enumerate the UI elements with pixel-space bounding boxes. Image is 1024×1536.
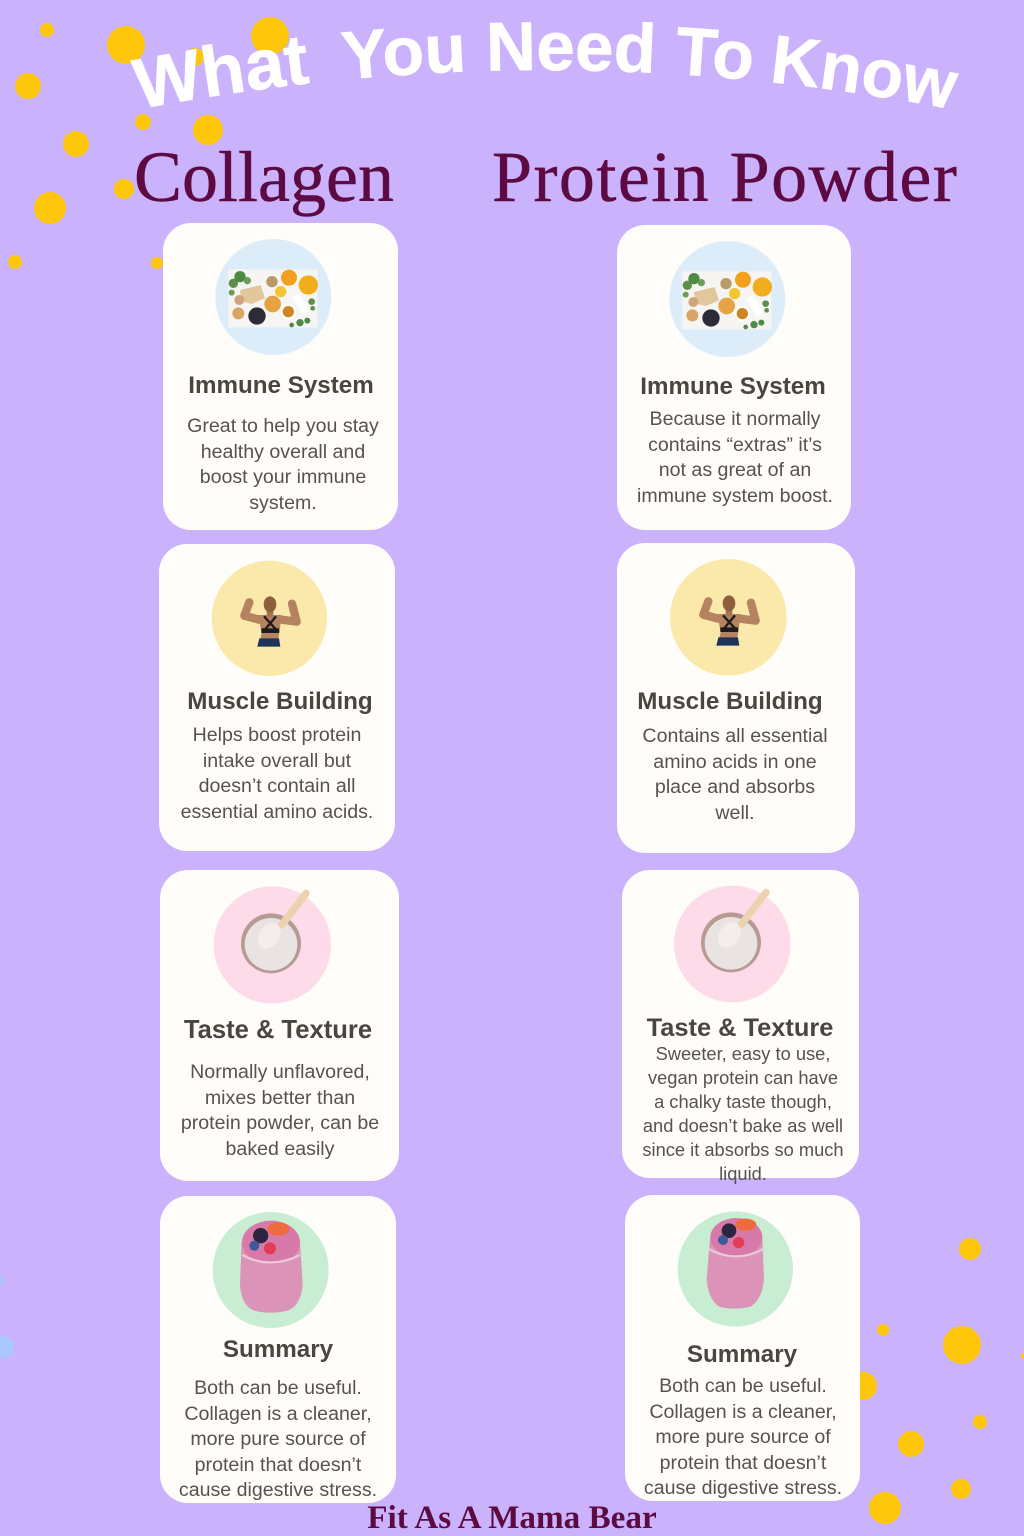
icon: berry smoothie jar	[678, 1211, 793, 1327]
heading: Protein Powder: Protein Powder	[492, 137, 958, 217]
panel: protein muscle building	[617, 543, 855, 853]
title: What You Need To Know: To	[678, 26, 752, 80]
text: protein immune: Because it normally	[650, 408, 820, 430]
text: protein muscle	[642, 725, 828, 824]
text: protein summary: Both can be useful.	[659, 1375, 827, 1397]
text: collagen summary: protein that doesn’t	[195, 1454, 361, 1476]
label: immune system: Immune System	[188, 372, 374, 399]
icon: immune foods	[669, 241, 786, 357]
icon: flexing woman	[212, 560, 327, 676]
text: protein immune	[637, 408, 833, 507]
panel: protein summary	[625, 1195, 860, 1501]
text: protein taste: since it absorbs so much	[642, 1139, 844, 1160]
text: collagen summary	[179, 1377, 377, 1501]
footer: brand name: Fit As A Mama Bear	[367, 1499, 657, 1536]
title: What You Need To Know: Know	[773, 35, 959, 108]
text: collagen taste: baked easily	[226, 1138, 334, 1160]
label: summary: Summary	[223, 1336, 333, 1363]
icon: berry smoothie jar	[212, 1212, 329, 1328]
text: protein muscle: place and absorbs	[655, 776, 815, 798]
text: protein summary: more pure source of	[655, 1426, 831, 1448]
text: protein summary	[644, 1375, 842, 1499]
text: protein muscle: Contains all essential	[642, 725, 828, 747]
label: muscle building: Muscle Building	[637, 688, 823, 715]
text: protein immune: not as great of an	[659, 459, 811, 481]
text: protein taste: Sweeter, easy to use,	[656, 1043, 830, 1064]
text: collagen muscle: doesn’t contain all	[199, 775, 355, 797]
title: What You Need To Know	[130, 22, 959, 108]
panel: protein immune system	[617, 225, 851, 530]
text: collagen immune: healthy overall and	[201, 441, 365, 463]
text: collagen summary: Both can be useful.	[194, 1377, 362, 1399]
label: taste and texture: Taste & Texture	[184, 1016, 372, 1044]
title: What You Need To Know: You	[340, 28, 463, 78]
text: collagen immune: Great to help you stay	[187, 415, 379, 437]
panel: collagen immune system	[163, 223, 398, 530]
text: collagen taste: protein powder, can be	[181, 1112, 379, 1134]
text: collagen taste: mixes better than	[205, 1087, 355, 1109]
title: What You Need To Know: Need	[490, 22, 653, 73]
text: collagen taste	[181, 1061, 379, 1160]
icon: flexing woman	[670, 559, 787, 676]
text: protein summary: cause digestive stress.	[644, 1477, 842, 1499]
heading: Collagen: Collagen	[134, 137, 394, 217]
label: muscle building: Muscle Building	[187, 688, 373, 715]
text: protein taste: a chalky taste though,	[654, 1091, 832, 1112]
label: summary: Summary	[687, 1341, 797, 1368]
panel: collagen summary	[160, 1196, 396, 1503]
text: collagen immune: boost your immune	[200, 466, 366, 488]
icon: powder bowl with spoon	[214, 886, 331, 1004]
text: protein muscle: well.	[715, 802, 755, 824]
label: taste and texture: Taste & Texture	[647, 1014, 833, 1042]
text: protein summary: Collagen is a cleaner,	[649, 1401, 837, 1423]
text: protein immune: contains “extras” it’s	[648, 434, 822, 456]
panel: collagen taste and texture	[160, 870, 399, 1181]
text: collagen muscle: Helps boost protein	[193, 724, 361, 746]
panel: protein taste and texture	[622, 870, 859, 1178]
text: collagen muscle: intake overall but	[203, 750, 351, 772]
text: collagen summary: cause digestive stress.	[179, 1479, 377, 1501]
text: protein taste: liquid.	[719, 1163, 767, 1184]
text: collagen taste: Normally unflavored,	[190, 1061, 370, 1083]
title: What You Need To Know: What	[130, 38, 310, 108]
text: collagen summary: more pure source of	[190, 1428, 366, 1450]
text: protein taste	[642, 1043, 844, 1184]
text: collagen immune: system.	[249, 492, 317, 514]
text: protein immune: immune system boost.	[637, 485, 833, 507]
text: collagen summary: Collagen is a cleaner,	[184, 1403, 372, 1425]
text: protein taste: and doesn’t bake as well	[643, 1115, 843, 1136]
panel: collagen muscle building	[159, 544, 395, 851]
text: collagen muscle: essential amino acids.	[181, 801, 373, 823]
label: immune system: Immune System	[640, 373, 826, 400]
text: protein summary: protein that doesn’t	[660, 1452, 826, 1474]
text: protein taste: vegan protein can have	[648, 1067, 838, 1088]
icon: immune foods	[215, 239, 332, 355]
text: collagen immune	[187, 415, 379, 514]
text: protein muscle: amino acids in one	[653, 751, 817, 773]
icon: powder bowl with spoon	[674, 886, 791, 1002]
text: collagen muscle	[181, 724, 373, 823]
